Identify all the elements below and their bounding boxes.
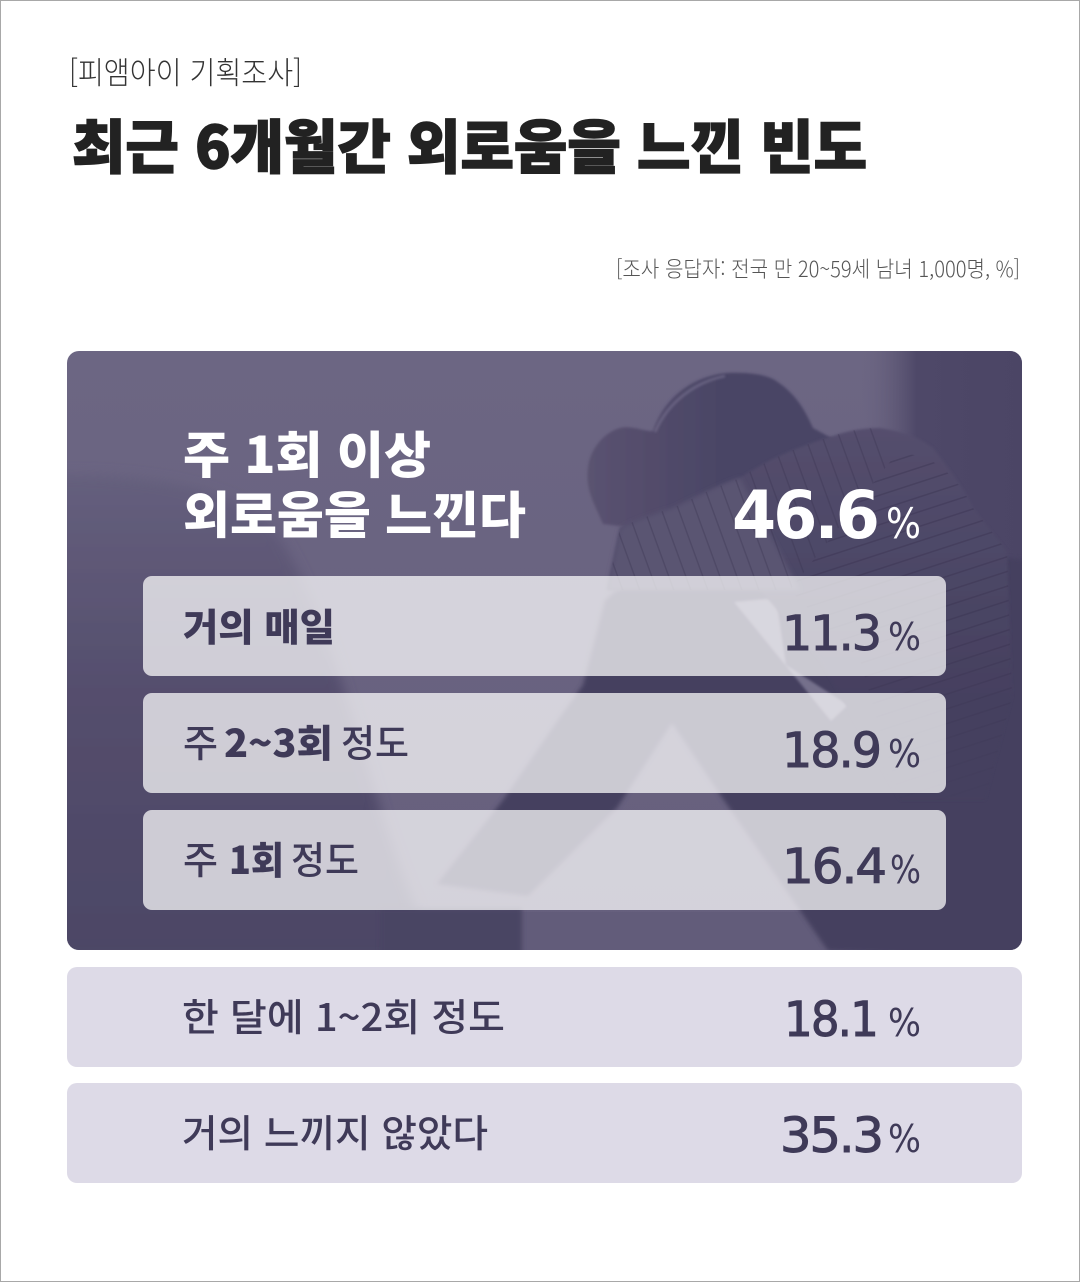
row: two to three times a week: 18.9 (782, 723, 880, 779)
respondent note: [조사 응답자: 전국 만 20~59세 남녀 1,000명, %] (616, 252, 1020, 284)
figure: head and bun (587, 373, 835, 530)
row: two to three times a week: 주 (183, 713, 218, 768)
row: two to three times a week: % (888, 732, 921, 776)
row: almost daily: 거의 매일 (183, 597, 335, 652)
value: 46.6 percent: % (886, 499, 921, 548)
row: almost daily: % (888, 615, 921, 659)
row: once a week: 16.4 (782, 839, 885, 895)
row: once a week: 1회 (229, 830, 284, 885)
row: once or twice a month: % (888, 1001, 921, 1045)
heading: weekly or more: 외로움을 느낀다 (183, 476, 526, 548)
sleeve stripes (612, 428, 1007, 596)
figure: sleeve (610, 428, 1006, 607)
row: two to three times a week (143, 693, 946, 793)
row: two to three times a week: 정도 (341, 713, 409, 768)
bottom floor (500, 912, 840, 950)
figure: legs (444, 592, 1022, 950)
curtain on the left (67, 496, 384, 950)
headphone band (655, 376, 725, 432)
title: 최근 6개월간 외로움을 느낀 빈도 (72, 101, 867, 185)
panel: weekly loneliness (20, 351, 1030, 960)
row: hardly ever: 35.3 (780, 1108, 882, 1164)
survey source label: [피앰아이 기획조사] (69, 48, 302, 93)
shoulder stripes (811, 455, 1007, 596)
row: once or twice a month (67, 967, 1022, 1067)
row: hardly ever: % (888, 1117, 921, 1161)
value: 46.6 percent: 46.6 (732, 477, 877, 554)
heading: weekly or more: 주 1회 이상 (183, 416, 431, 488)
row: once a week: % (890, 848, 921, 892)
row: once or twice a month: 한 달에 1~2회 정도 (182, 987, 505, 1042)
light wedge between arm and leg (734, 598, 848, 721)
row: once a week (143, 810, 946, 910)
forearm stripes (612, 428, 885, 576)
panel background photo (20, 351, 1030, 960)
row: once or twice a month: 18.1 (784, 992, 877, 1048)
row: almost daily (143, 576, 946, 676)
heading: weekly or more (183, 416, 526, 548)
sleeve light part (612, 481, 792, 576)
row: two to three times a week: 2~3회 (224, 713, 333, 768)
wall on the right (888, 351, 1022, 950)
row: hardly ever: 거의 느끼지 않았다 (182, 1103, 488, 1158)
row: almost daily: 11.3 (782, 606, 880, 662)
row: once a week: 정도 (291, 830, 359, 885)
row: once a week: 주 (183, 830, 218, 885)
row: hardly ever (67, 1083, 1022, 1183)
